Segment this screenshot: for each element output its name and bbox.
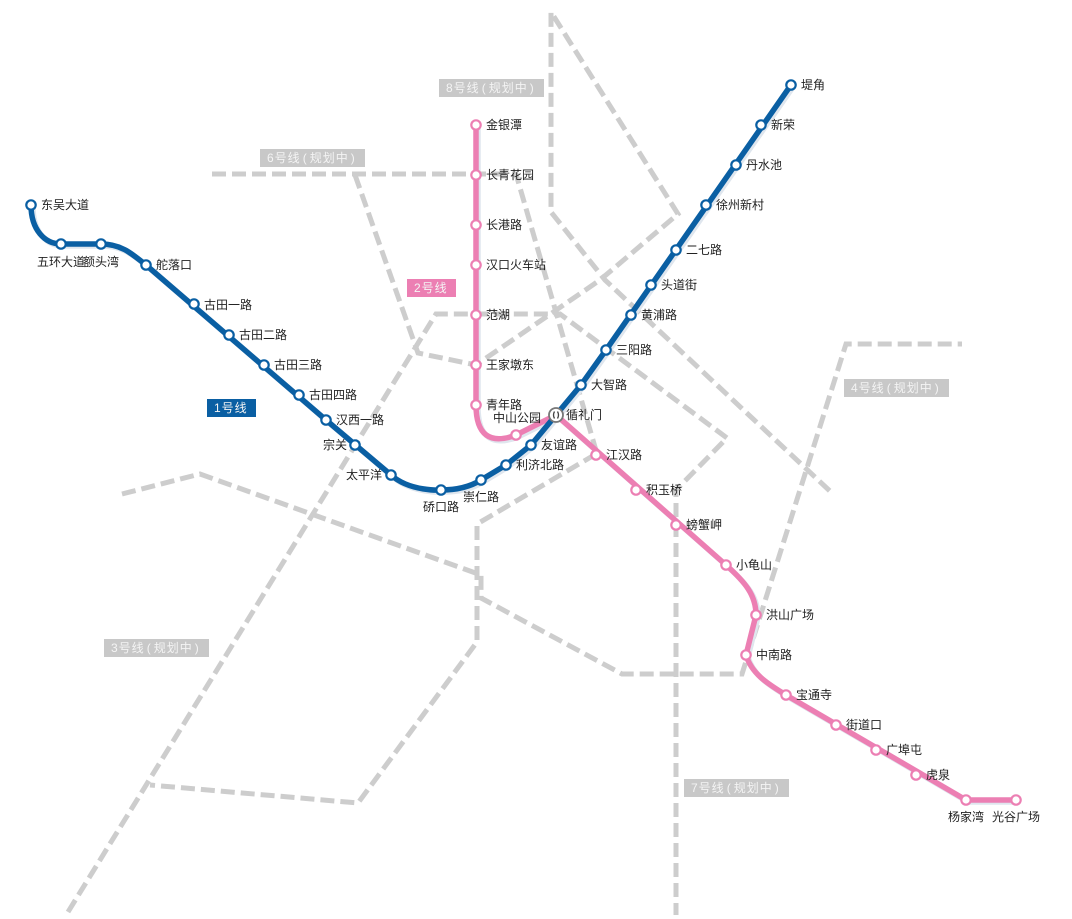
line 1 stations [26,78,825,514]
station: 金银潭: 金银潭 [486,117,522,132]
station: 杨家湾: 杨家湾 [948,809,984,824]
station: 太平洋: 太平洋 [346,467,382,482]
station: 利济北路: 利济北路 [516,457,564,472]
station: 螃蟹岬 [671,517,722,532]
station: 古田二路: 古田二路 [239,327,287,342]
station name: 循礼门 [566,407,602,422]
station: 友谊路: 友谊路 [541,437,577,452]
station: 黄浦路 [626,307,677,322]
station: 汉西一路: 汉西一路 [336,412,384,427]
station: 长青花园: 长青花园 [486,167,534,182]
label: line 3: 3号线(规划中) [111,640,200,655]
station: 二七路 [671,242,722,257]
station: 硚口路: 硚口路 [423,499,459,514]
station: 光谷广场: 光谷广场 [992,810,1040,824]
station: 江汉路: 江汉路 [606,447,642,462]
station: 螃蟹岬: 螃蟹岬 [686,517,722,532]
label: line 7 [684,779,789,797]
station: 徐州新村: 徐州新村 [716,197,764,212]
station: 中山公园: 中山公园 [493,410,541,425]
station: 宗关: 宗关 [323,437,347,452]
label: line 8 [439,79,544,97]
station: 大智路: 大智路 [591,377,627,392]
station: 崇仁路 [463,475,499,504]
planned line upper loop [355,12,832,493]
station: 宝通寺: 宝通寺 [796,688,832,702]
station: 青年路 [471,397,522,412]
label: line 6: 6号线(规划中) [267,150,356,165]
planned line 6 and 8 upper branch [212,174,597,454]
station: 额头湾 [83,239,119,269]
station: 丹水池: 丹水池 [746,158,782,172]
station: 青年路: 青年路 [486,397,522,412]
station: 江汉路 [591,447,642,462]
station: 虎泉 [911,768,950,782]
station: 积玉桥: 积玉桥 [646,483,682,497]
station: 新荣 [756,117,795,132]
station: 光谷广场 [992,795,1040,824]
station: 舵落口: 舵落口 [156,257,192,272]
label: line 3 [104,639,209,657]
label: line 7: 7号线(规划中) [691,780,780,795]
station: 广埠屯: 广埠屯 [886,743,922,757]
station: 杨家湾 [948,795,984,824]
station: 额头湾: 额头湾 [83,254,119,269]
planned line 3 [68,314,727,915]
station: 王家墩东: 王家墩东 [486,357,534,372]
station: 宗关 [323,437,360,452]
interchange station: 循礼门 [549,407,602,422]
line labels [104,79,949,797]
station: 洪山广场: 洪山广场 [766,608,814,622]
station: 中南路 [741,647,792,662]
label: line 2 [407,279,456,297]
label: line 8: 8号线(规划中) [446,80,535,95]
label: line 2: 2号线 [414,281,448,295]
station: 中南路: 中南路 [756,647,792,662]
station: 长港路: 长港路 [486,217,522,232]
station: 东吴大道: 东吴大道 [41,198,89,212]
label: line 1 [207,399,256,417]
station: 金银潭 [471,117,522,132]
station: 五环大道: 五环大道 [37,255,85,269]
label: line 6 [260,149,365,167]
label: line 1: 1号线 [214,401,248,415]
line shadows [33,87,1018,802]
station: 古田一路: 古田一路 [204,297,252,312]
station: 街道口: 街道口 [846,718,882,732]
station: 舵落口 [141,257,192,272]
station: 崇仁路: 崇仁路 [463,489,499,504]
station: 二七路: 二七路 [686,242,722,257]
label: line 4 [844,379,949,397]
station: 中山公园 [493,410,541,440]
station: 小龟山: 小龟山 [736,558,772,572]
icon: interchange [549,408,563,422]
station: 古田四路: 古田四路 [309,387,357,402]
station: 三阳路: 三阳路 [616,342,652,357]
station: 头道街: 头道街 [661,278,697,292]
station: 堤角: 堤角 [801,78,825,92]
station: 五环大道 [37,239,85,269]
station: 长港路 [471,217,522,232]
station: 范湖: 范湖 [486,307,510,322]
line 2 stations [471,117,1040,824]
station: 硚口路 [423,485,459,514]
station: 黄浦路: 黄浦路 [641,307,677,322]
station: 虎泉: 虎泉 [926,768,950,782]
station: 友谊路 [526,437,577,452]
station: 范湖 [471,307,510,322]
station: 三阳路 [601,342,652,357]
label: line 4: 4号线(规划中) [851,380,940,395]
station: 古田三路: 古田三路 [274,357,322,372]
planned line 4 [122,344,962,674]
station: 新荣: 新荣 [771,117,795,132]
metro line 1 [31,85,791,490]
station: 太平洋 [346,467,396,482]
planned line 3 branch [150,454,596,803]
station: 汉口火车站: 汉口火车站 [486,257,546,272]
metro line 2 [476,125,1016,800]
station: 大智路 [576,377,627,392]
station: 堤角 [786,78,825,92]
